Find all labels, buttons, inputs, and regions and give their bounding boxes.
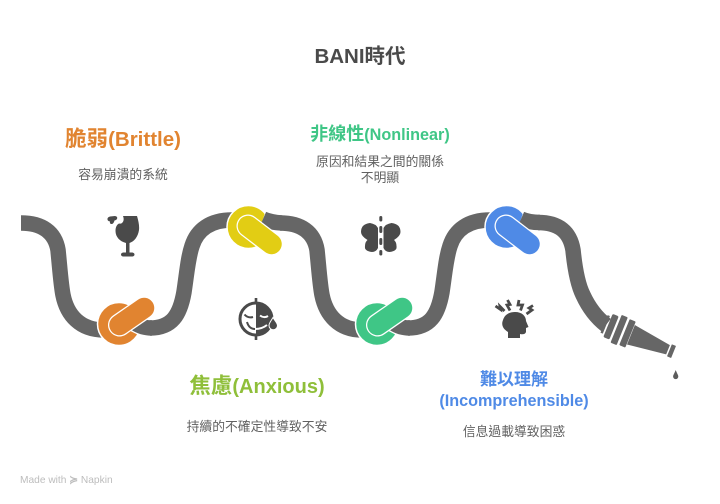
water drop [673,370,678,379]
text: nonlinear description: 原因和結果之間的關係 [316,154,444,169]
text: nonlinear description: 不明顯 [361,170,399,185]
heading: anxious: 焦慮(Anxious) [189,374,325,398]
hose nozzle [598,310,679,366]
heading: nonlinear: 非線性(Nonlinear) [310,124,450,144]
icon: broken wine glass [107,216,139,256]
icon: head with lightning bolts [496,300,533,338]
text: incomprehensible description: 信息過載導致困惑 [463,424,565,439]
text: nonlinear description [316,154,444,185]
heading: incomprehensible [439,370,589,410]
text: anxious description: 持續的不確定性導致不安 [187,419,327,434]
knot: blue [485,206,540,248]
heading: brittle: 脆弱(Brittle) [65,127,181,151]
heading: incomprehensible: 難以理解 [480,370,548,389]
title: BANI時代 [314,45,406,68]
text: brittle description: 容易崩潰的系統 [78,167,168,182]
icon: anxious face [240,298,278,340]
footer: Made with Napkin: Made with ≽ Napkin [20,474,113,486]
icon: butterfly [361,216,400,256]
heading: incomprehensible: (Incomprehensible) [439,392,589,410]
knot: green [356,302,410,346]
knot: orange [98,302,152,346]
hose rope [21,220,606,330]
knot: yellow [227,206,282,248]
